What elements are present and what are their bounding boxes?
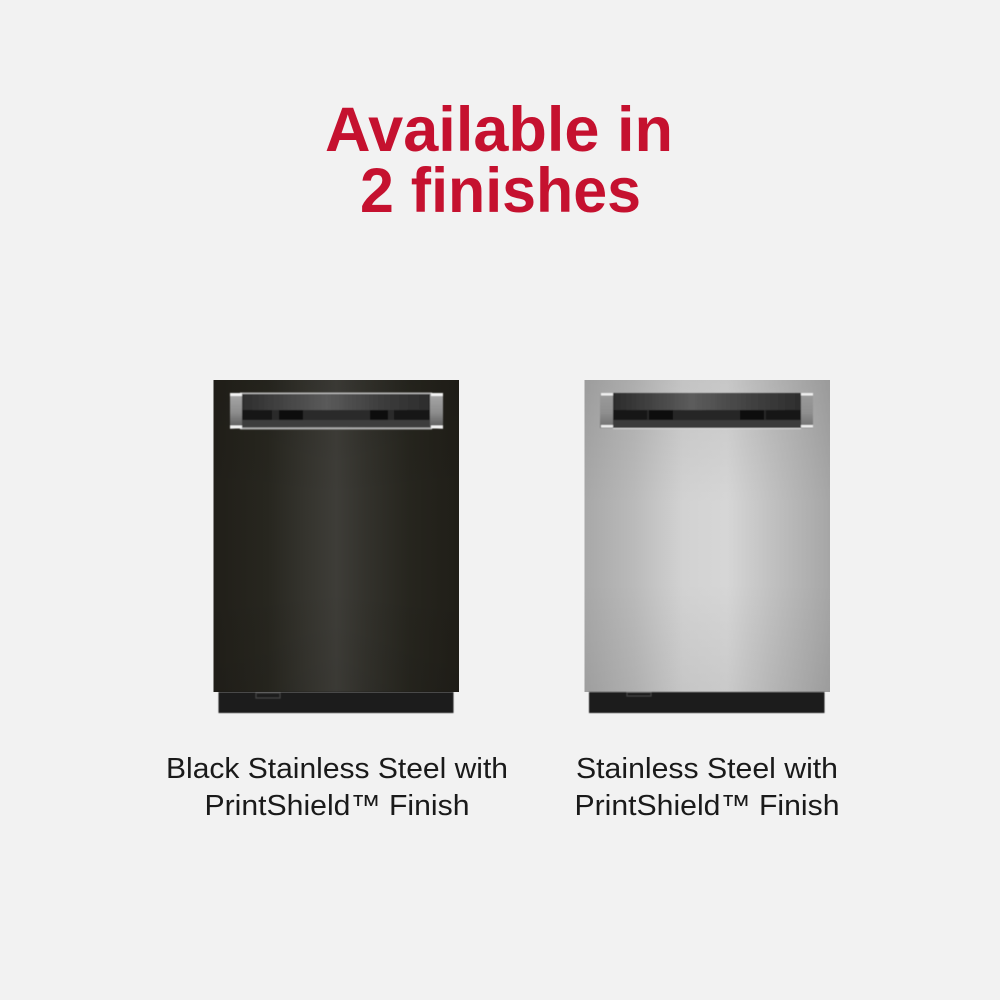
label: black finish [166,753,508,822]
handle [230,392,443,430]
label: stainless finish: PrintShield™ Finish [574,790,840,822]
label: black finish: PrintShield™ Finish [204,790,470,822]
dishwasher: black stainless steel [214,380,459,713]
title [325,95,673,226]
door panel [584,380,830,692]
handle [600,393,813,429]
title: Available in [325,95,673,165]
label: stainless finish: Stainless Steel with [576,753,838,785]
door panel [214,380,459,692]
dishwasher: stainless steel [584,380,830,713]
label: black finish: Black Stainless Steel with [166,753,508,785]
toe kick [589,692,824,713]
title: 2 finishes [360,156,641,226]
toe kick [218,692,454,713]
label: stainless finish [574,753,840,822]
